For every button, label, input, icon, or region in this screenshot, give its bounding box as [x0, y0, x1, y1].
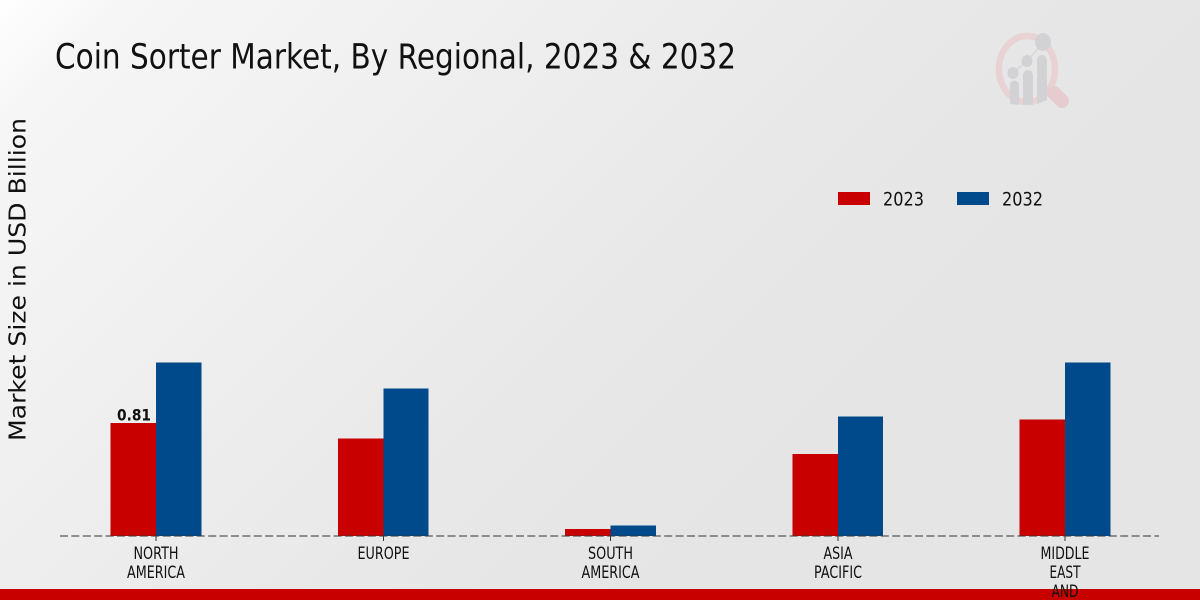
icon: watermark logo — [999, 33, 1062, 105]
data label: 0.81: 0.81 — [117, 406, 151, 425]
label: South America — [582, 543, 640, 582]
label: North America — [127, 543, 185, 582]
bars: Asia Pacific — [792, 416, 883, 536]
label: Europe: EUROPE — [358, 543, 410, 563]
label: Middle East and — [1040, 543, 1090, 582]
label: Asia Pacific — [814, 543, 862, 582]
bars: Middle East and Africa — [1020, 362, 1110, 536]
legend item: 2023 — [838, 188, 924, 210]
legend — [838, 188, 1043, 210]
label: Asia Pacific: PACIFIC — [814, 562, 862, 582]
x axis labels — [127, 543, 1090, 582]
label: South America: SOUTH — [588, 543, 633, 563]
y axis label: Market Size in USD Billion — [6, 118, 32, 441]
bar chart — [60, 362, 1159, 541]
bars: South America — [565, 526, 656, 536]
legend item: 2023: 2023 — [883, 188, 924, 210]
legend item: 2032: 2032 — [1002, 188, 1043, 210]
label: Middle East and: MIDDLE — [1040, 543, 1090, 563]
title: Coin Sorter Market, By Regional, 2023 & 2032 — [55, 38, 736, 78]
bars: Europe — [338, 388, 428, 536]
footer bar — [0, 589, 1200, 600]
label: North America: AMERICA — [127, 562, 185, 582]
label: North America: NORTH — [134, 543, 178, 563]
bars: North America — [110, 362, 202, 536]
label: Asia Pacific: ASIA — [824, 543, 853, 563]
legend item: 2032 — [957, 188, 1043, 210]
label: South America: AMERICA — [582, 562, 640, 582]
label: Middle East and: EAST — [1050, 562, 1081, 582]
